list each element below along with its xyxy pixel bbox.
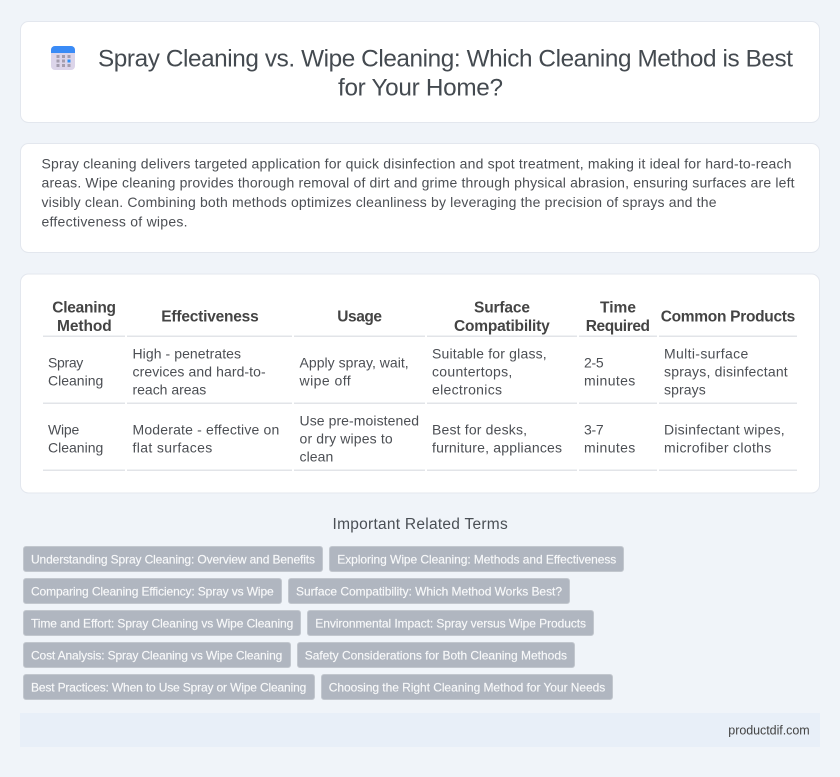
table row: spray cleaning: Multi-surface	[664, 345, 749, 361]
table header row	[43, 299, 797, 337]
heading: important related terms: Important Related Terms	[332, 516, 508, 533]
tag row 3	[24, 610, 594, 636]
table row: wipe cleaning: furniture, appliances	[432, 439, 562, 455]
panel: introduction text: visibly clean. Combining both methods optimizes cleanliness by leveraging the precision of sprays and the	[42, 194, 717, 210]
table row: wipe cleaning: Use pre-moistened	[300, 412, 419, 428]
title: Spray Cleaning vs. Wipe Cleaning: Which Cleaning Method is Best	[98, 46, 793, 72]
table header row: Surface	[474, 299, 530, 316]
table row: spray cleaning: High - penetrates	[132, 345, 241, 361]
footer	[20, 713, 820, 747]
table row: spray cleaning: crevices and hard-to-	[132, 363, 266, 379]
table row: spray cleaning: 2-5	[584, 354, 604, 370]
table header row: Usage	[337, 308, 382, 325]
tag row 2	[24, 578, 570, 604]
tag row 4	[24, 642, 574, 668]
table row: spray cleaning: minutes	[584, 372, 635, 388]
panel: introduction text: Spray cleaning delivers targeted application for quick disinfection and spot treatment, making it ideal for hard-to-reach	[42, 155, 792, 171]
table header row: Cleaning	[52, 299, 116, 316]
table row: wipe cleaning: Wipe	[48, 421, 80, 437]
table row: spray cleaning: Suitable for glass,	[432, 345, 547, 361]
tag row 3: Time and Effort: Spray Cleaning vs Wipe Cleaning	[31, 616, 293, 630]
footer: productdif.com	[728, 723, 810, 737]
table row: wipe cleaning: Disinfectant wipes,	[664, 421, 785, 437]
table row: wipe cleaning: minutes	[584, 439, 635, 455]
icon: calendar	[51, 46, 75, 70]
tag row 5	[24, 674, 612, 700]
panel: comparison table	[20, 274, 820, 493]
tag row 5: Best Practices: When to Use Spray or Wipe Cleaning	[31, 680, 306, 694]
panel: introduction text: areas. Wipe cleaning provides thorough removal of dirt and grime through physical abrasion, ensuring surfaces are left	[42, 175, 795, 191]
panel: introduction text: effectiveness of wipes.	[42, 214, 188, 230]
tag row 3: Environmental Impact: Spray versus Wipe Products	[315, 616, 586, 630]
tag row 4: Cost Analysis: Spray Cleaning vs Wipe Cleaning	[31, 648, 282, 662]
table row: wipe cleaning: or dry wipes to	[300, 430, 393, 446]
table row: wipe cleaning: microfiber cloths	[664, 439, 771, 455]
panel: introduction text	[20, 144, 820, 252]
tag row 5: Choosing the Right Cleaning Method for Your Needs	[329, 680, 605, 694]
table row: wipe cleaning: clean	[300, 448, 333, 464]
table row: wipe cleaning: Best for desks,	[432, 421, 527, 437]
table row: spray cleaning: Apply spray, wait,	[300, 354, 409, 370]
table header row: Time	[600, 299, 636, 316]
table header row: Method	[57, 318, 112, 335]
table row: spray cleaning: electronics	[432, 381, 502, 397]
table row: spray cleaning: reach areas	[132, 381, 206, 397]
table row: wipe cleaning: Cleaning	[48, 439, 103, 455]
panel: title header	[20, 22, 820, 122]
tag row 2: Surface Compatibility: Which Method Works Best?	[296, 584, 562, 598]
table row: spray cleaning: wipe off	[298, 372, 351, 388]
table row: spray cleaning: sprays	[664, 381, 706, 397]
table row: wipe cleaning: 3-7	[584, 421, 604, 437]
tag row 1	[24, 546, 624, 572]
table row: wipe cleaning: Moderate - effective on	[132, 421, 279, 437]
tag row 4: Safety Considerations for Both Cleaning Methods	[305, 648, 567, 662]
table row: spray cleaning: Spray	[48, 354, 83, 370]
tag row 1: Exploring Wipe Cleaning: Methods and Effectiveness	[337, 552, 616, 566]
table header row: Required	[586, 318, 650, 335]
table row: wipe cleaning: flat surfaces	[132, 439, 212, 455]
table header row: Effectiveness	[161, 308, 259, 325]
table header row: Compatibility	[454, 318, 550, 335]
table row: wipe cleaning	[43, 412, 797, 471]
table row: spray cleaning: sprays, disinfectant	[664, 363, 788, 379]
panel: related term tags	[24, 546, 624, 700]
title: for Your Home?	[338, 74, 503, 102]
table row: spray cleaning: Cleaning	[48, 372, 103, 388]
table header row: Common Products	[661, 308, 795, 325]
table row: spray cleaning: countertops,	[432, 363, 512, 379]
table row: spray cleaning	[43, 345, 797, 404]
tag row 1: Understanding Spray Cleaning: Overview and Benefits	[31, 552, 315, 566]
title	[98, 46, 793, 102]
tag row 2: Comparing Cleaning Efficiency: Spray vs Wipe	[31, 584, 274, 598]
